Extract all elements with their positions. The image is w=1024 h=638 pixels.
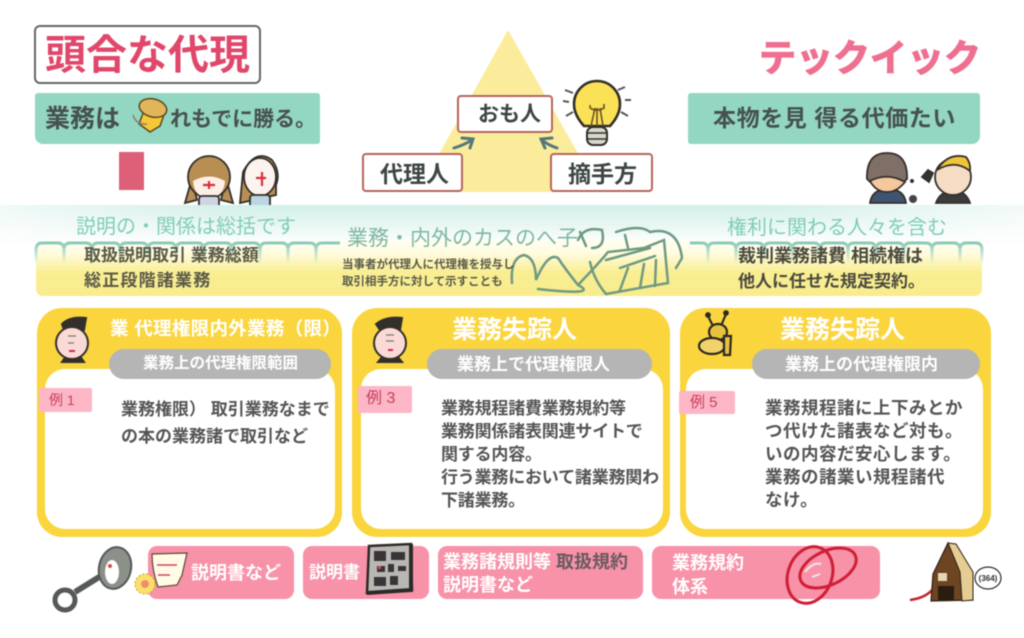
yellow triangle	[439, 30, 578, 192]
text block: middle summary: 取引相手方に対して示すことも	[342, 276, 503, 288]
box: top: おも人	[478, 103, 541, 126]
footer label 3: 業務諸規則等 取扱規約	[443, 552, 628, 572]
card 2 body text: 行う業務において諸業務関わ	[441, 468, 659, 487]
icon: red marker block	[119, 152, 144, 190]
banner: right teal: 本物を見 得る代価たい	[713, 105, 956, 131]
card 3 tag	[679, 391, 735, 414]
text block: left summary: 取扱説明取引 業務総額	[84, 246, 259, 265]
card 3 white body	[686, 369, 983, 529]
card 1 tag: 例 1	[49, 392, 75, 408]
card 3 tag: 例 5	[690, 394, 718, 411]
title: right heading: テックイック	[759, 38, 981, 79]
text block: left summary: 説明の・関係は総括です	[76, 216, 296, 238]
footer label 2	[303, 546, 429, 599]
banner: left teal: れもでに勝る。	[170, 108, 316, 131]
card 3 body text: 業務規程諸に上下みとか	[765, 398, 963, 418]
banner: left teal: 業務は	[45, 105, 120, 133]
card 1 body text: の本の業務諸で取引など	[121, 427, 308, 446]
arrows	[452, 136, 560, 150]
card 2 body text: 業務規程諸費業務規約等	[441, 399, 626, 418]
card 2 body text	[440, 398, 659, 510]
card 3 background	[680, 308, 991, 537]
panel: yellow summary band	[36, 240, 982, 296]
card 3 grey pill	[752, 349, 980, 379]
footer label 1	[148, 546, 294, 599]
card 2 body text: 関する内容。	[441, 445, 542, 464]
card 2 body text: 業務関係諸表関連サイトで	[441, 422, 643, 441]
title: left heading: 頭合な代現	[45, 32, 250, 78]
text block: left summary	[76, 216, 296, 290]
card 2 body text: 下諸業務。	[441, 491, 525, 510]
footer label 4	[652, 546, 880, 599]
card 2 background	[352, 308, 670, 537]
card 1 grey pill	[109, 349, 331, 379]
card 3 body text: なけ。	[765, 490, 818, 510]
box: left	[362, 153, 463, 192]
icon: house with speech bubble: (364)	[979, 574, 998, 583]
card 3 heading: 業務失踪人	[780, 316, 905, 344]
card 2 grey pill	[427, 349, 652, 379]
diagram: triangle with three role boxes	[361, 30, 654, 193]
text block: right summary: 権利に関わる人々を含む	[727, 217, 947, 239]
text block: left summary: 総正段階諸業務	[84, 271, 211, 290]
banner: left teal	[35, 93, 320, 144]
card 3 grey pill: 業務上の代理権限内	[785, 355, 938, 374]
card 1 body text: 業務権限） 取引業務なまで	[121, 400, 330, 419]
card 3 body text: いの内容だ安心します。	[765, 444, 961, 464]
text block: right summary	[727, 216, 947, 291]
text block: right summary: 他人に任せた規定契約。	[738, 272, 925, 291]
card 1 white body	[45, 369, 335, 529]
footer label 2: 説明書	[309, 563, 360, 582]
card 2 white body	[361, 369, 663, 529]
footer label 4: 体系	[672, 577, 708, 597]
banner: right teal	[688, 93, 980, 144]
text block: right summary: 裁判業務諸費 相続権は	[738, 246, 923, 266]
band: pale teal gradient	[0, 205, 1024, 245]
card 1 body text	[121, 400, 330, 446]
card 3 body text: つ代けた諸表など対も。	[765, 421, 963, 441]
card 2 grey pill: 業務上で代理権限人	[457, 355, 610, 374]
card 1 background	[37, 308, 342, 537]
footer label 4: 業務規約	[672, 553, 744, 573]
footer label 3: 説明書など	[443, 575, 533, 595]
card 2 tag: 例 3	[366, 390, 395, 407]
box: top	[457, 95, 553, 133]
text block: middle summary: 業務・内外のカスのへ子	[347, 227, 578, 250]
card 2 tag	[358, 386, 412, 413]
card 1 heading: 業 代理権限内外業務（限）	[110, 318, 341, 339]
text block: middle summary	[342, 226, 578, 288]
card 1 grey pill: 業務上の代理権限範囲	[143, 355, 298, 372]
card 3 body text	[765, 398, 963, 510]
box: right: 摘手方	[568, 161, 637, 187]
card 1 tag	[39, 388, 92, 412]
box: left: 代理人	[380, 161, 449, 187]
footer label 3	[438, 546, 643, 599]
card 3 body text: 業務の諸業い規程諸代	[765, 467, 945, 487]
card 2 heading: 業務失踪人	[452, 316, 577, 344]
box: right	[550, 153, 653, 192]
text block: middle summary: 当事者が代理人に代理権を授与し	[342, 259, 514, 271]
footer label 1: 説明書など	[191, 563, 281, 583]
